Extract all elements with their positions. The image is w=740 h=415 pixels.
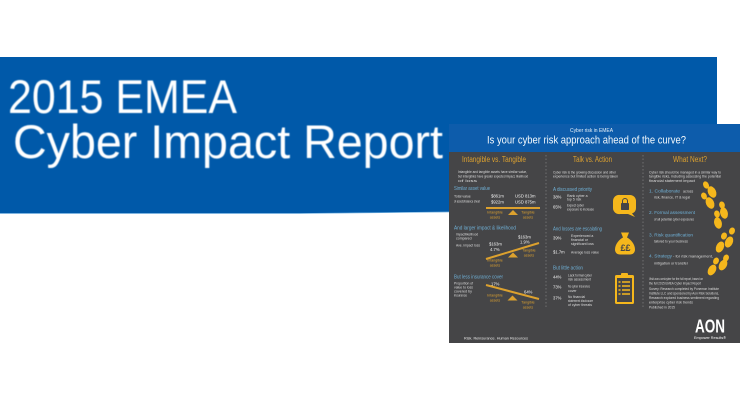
subheading: less insurance cover: But less insurance cover [454,274,503,280]
loss stats: $1.7m [553,250,565,254]
impact figures: 1.9% [520,240,530,244]
balance scale 2: Intangible [487,258,503,262]
step 1: 1. Collaborate [649,188,680,194]
priority stats: 65% [553,204,562,210]
asset value figures: USD 813m [515,194,536,198]
closing notes: Institute LLC and sponsored by Aon Risk Solutions, [649,292,719,296]
icon: lock speech bubble [613,195,636,217]
asset value figures: of assets/balance sheet [454,200,480,204]
priority stats: exposure to increase [567,208,594,212]
impact figures: 4.7% [490,247,500,252]
step 2: of all potential cyber exposures [654,218,694,222]
closing notes [649,277,719,310]
step 3: tailored to your business [654,240,688,244]
balance scale 2 [486,243,539,268]
balance scale 1: assets [490,216,500,220]
banner [0,57,717,214]
action stats [553,274,593,307]
step 1: risk, finance, IT & legal [654,196,690,200]
subheading: larger impact: And larger impact & likelihood [454,226,516,232]
intro text: Cyber risk should be managed in a similar way to [649,170,721,174]
balance scale 3: Tangible [521,300,535,304]
insurance figures: 17% [491,282,500,286]
step 4: 4. Strategy [649,254,673,260]
heading: Talk vs. Action [573,155,612,164]
step 4: mitigation or transfer [654,262,689,266]
balance scale 3: assets [523,306,533,310]
icon: money bag: ££ [620,243,631,253]
balance scale 3 [486,285,539,310]
balance scale 2: assets [524,254,534,258]
intro text: experience but limited action is being taken [553,174,618,178]
panel: intangible vs tangible [454,155,540,340]
closing notes: Published in 2015 [649,306,675,310]
icon: money bag [615,232,635,254]
subheading: little action: But little action [553,266,583,272]
impact figures: $163m [489,242,502,246]
step 1 [649,188,694,200]
intro text: of loss [458,179,477,183]
priority stats [553,194,594,212]
insurance text: insurance [454,294,467,298]
intro text: but intangibles have greater expected impact, likelihood [458,174,528,178]
balance scale 2: Tangible [522,248,536,252]
insurance figures: 64% [524,290,533,294]
loss stats: 39% [553,236,562,240]
infographic [449,124,740,343]
balance scale 1 [486,208,540,220]
asset value figures: $922m [491,200,504,204]
closing notes: Research explored business sentiment regarding [649,296,719,300]
asset value figures: $861m [491,194,504,198]
closing notes: the full 2015 EMEA Cyber Impact Report [649,282,701,286]
step 4: - for risk management, [673,254,713,258]
loss stats: financial or [571,238,589,242]
balance scale 3: Intangible [487,294,503,298]
action stats: 44% [553,274,562,280]
insurance figures [491,282,533,294]
infographic header: Cyber risk in EMEA [570,128,614,134]
intro text: Cyber risk is the growing discussion and other [553,170,617,174]
priority stats: top 5 risk [567,198,581,202]
logo: Aon: AON [695,316,725,336]
closing notes: Survey: Research completed by Ponemon Institute [649,287,719,291]
step 3 [649,232,693,244]
asset value figures: USD 875m [515,200,536,204]
impact text [456,232,480,248]
balance scale 1: Intangible [487,210,503,214]
loss stats: Experienced a [571,234,593,238]
balance scale 3: assets [490,298,500,302]
impact text: Ave. impact loss [456,244,480,248]
insurance text: Proportion of [454,282,473,286]
intro text [649,170,721,183]
intro text: financial statement impact [649,179,695,183]
loss stats: significant loss [571,242,594,246]
infographic background [449,152,740,343]
balance scale 1: Tangible [521,210,535,214]
impact text: compared [456,236,472,240]
impact figures [489,234,531,252]
loss stats [553,234,599,254]
step 4 [649,254,713,266]
infographic header [449,124,740,152]
panel: what next [649,155,736,340]
closing notes: Visit aon.com/cyber for the full report, based on [649,277,703,281]
action stats: cover [568,289,577,293]
subheading: similar asset value: Similar asset value [454,186,490,192]
icon: clipboard [615,273,634,304]
action stats: statement disclosure [568,299,593,303]
balance scale 1: assets [523,216,533,220]
priority stats: Rank cyber a [567,194,588,198]
action stats: No financial [568,295,585,299]
intro text [458,170,528,183]
action stats: 37% [553,296,562,300]
insurance text: covered by [454,290,472,294]
closing notes: enterprise cyber risk trends [649,300,693,304]
loss stats: Average loss value [571,250,599,254]
heading: Intangible vs. Tangible [462,155,526,164]
title: 2015 EMEA: 2015 EMEA [8,70,238,123]
action stats: of cyber threats [568,303,592,307]
impact text: Impact/likelihood [456,232,478,236]
insurance text: value to loss [454,286,473,290]
intro text [553,170,618,178]
priority stats: Expect cyber [567,204,585,208]
intro text: Intangible and tangible assets have similar value, [458,170,527,174]
step 3: 3. Risk quantification [649,232,693,238]
panel: talk vs action [553,155,636,307]
step 2 [649,210,696,222]
step 2: 2. Formal assessment [649,210,696,216]
intro text: tangible risks, including assessing the potential [649,174,721,178]
impact figures: $163m [518,234,531,240]
insurance text [454,282,473,298]
infographic header: Is your cyber risk approach ahead of the curve? [487,134,686,146]
subheading: discussed priority: A discussed priority [553,187,592,193]
action stats: risk assessment [568,278,591,282]
footer note: Risk. Reinsurance. Human Resources [464,336,528,340]
action stats: Lack formal cyber [568,274,593,278]
priority stats: 38% [553,194,562,200]
subheading: losses escalating: And losses are escalating [553,226,602,232]
step 1: across [683,190,694,194]
action stats: No cyber insurance [568,284,590,288]
title: Cyber Impact Report: Cyber Impact Report [13,115,443,168]
heading: What Next? [673,155,707,164]
asset value figures [454,194,536,204]
action stats: 73% [553,284,562,290]
asset value figures: Total value [454,194,471,198]
logo: Aon [694,316,726,340]
logo: Aon: Empower Results® [694,335,726,340]
balance scale 2: assets [490,264,500,268]
icon: footprints [700,180,736,277]
